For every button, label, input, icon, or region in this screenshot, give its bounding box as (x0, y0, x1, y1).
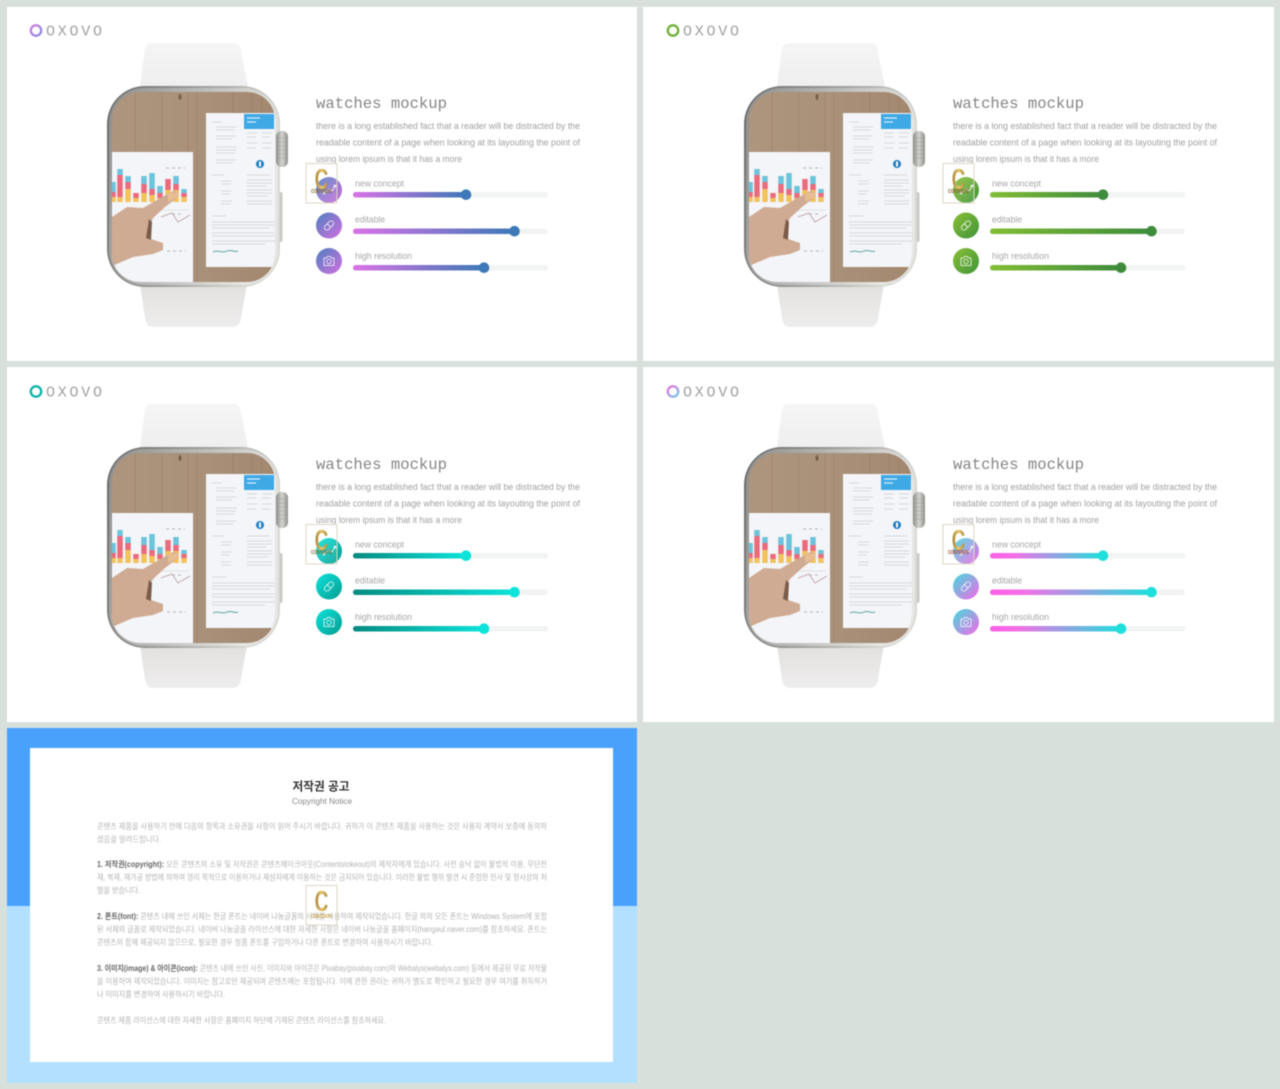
copyright section 3 (97, 963, 547, 999)
watermark: C (952, 525, 965, 557)
body text (953, 121, 1217, 164)
body text: readable content of a page when looking at its layouting the point of (953, 138, 1217, 148)
logo: OXOVO (46, 24, 102, 40)
progress: editable (953, 574, 1185, 600)
copyright section 1: 1. 저작권(copyright): 모든 콘텐츠의 소유 및 저작권은 콘텐츠메이크아웃(Contentstokeout)의 제작자에게 있습니다. 사전 승낙 없이 불법적 이용, 무단전 (97, 859, 547, 869)
copyright section 2 (97, 911, 548, 947)
progress: editable: editable (355, 576, 385, 586)
progress: editable (316, 212, 548, 238)
progress: high resolution: high resolution (992, 251, 1049, 261)
progress: high resolution: high resolution (355, 612, 412, 622)
watch mockup (107, 43, 288, 327)
copyright section 2: 2. 폰트(font): 콘텐츠 내에 쓰인 서체는 한글 폰트는 네이버 나눔글꼴의 서체를 사용하여 제작되었습니다. 한글 외의 모든 폰트는 Windows System에 포함 (97, 911, 548, 921)
watermark: CONTENTS (948, 550, 970, 556)
body text: there is a long established fact that a reader will be distracted by the (953, 482, 1217, 492)
heading: watches mockup (953, 456, 1084, 474)
watermark (306, 164, 337, 203)
progress: new concept: new concept (355, 540, 404, 550)
copyright intro: 셨음을 알려드립니다. (97, 834, 161, 844)
panel: purple watch slide (7, 7, 637, 361)
body text: using lorem ipsum is that it has a more (953, 154, 1099, 164)
heading: watches mockup (953, 95, 1084, 113)
copyright footer note: 콘텐츠 제품 라이선스에 대한 자세한 사항은 홈페이지 하단에 기재된 콘텐츠 라이선스를 참조하세요. (97, 1015, 386, 1025)
watermark: C (315, 525, 328, 557)
watermark: C (315, 164, 328, 196)
body text (316, 482, 580, 525)
copyright section 1: 벌을 받습니다. (97, 885, 140, 895)
copyright intro: 콘텐츠 제품을 사용하기 전에 다음의 항목과 소유권을 사항이 읽어 주시기 바랍니다. 귀하가 이 콘텐츠 제품을 사용하는 것은 사용자 계약서 보증에 동의하 (97, 821, 548, 831)
progress: high resolution (953, 609, 1185, 635)
body text: there is a long established fact that a reader will be distracted by the (953, 121, 1217, 131)
progress: editable (316, 574, 548, 600)
watermark: C (315, 886, 328, 918)
progress: high resolution: high resolution (355, 251, 412, 261)
copyright section 3: 나 이미지를 변경하여 사용하시기 바랍니다. (97, 989, 225, 999)
progress: high resolution: high resolution (992, 612, 1049, 622)
logo: OXOVO (46, 384, 102, 402)
watermark (306, 886, 337, 925)
body text: using lorem ipsum is that it has a more (316, 515, 462, 525)
progress: high resolution (316, 609, 548, 635)
progress: new concept: new concept (992, 540, 1041, 550)
logo: OXOVO (683, 24, 739, 40)
copyright title: 저작권 공고 (292, 778, 350, 794)
watermark: C (952, 164, 965, 196)
progress: new concept (953, 177, 1185, 203)
watch mockup (744, 404, 925, 688)
copyright title: Copyright Notice (292, 796, 352, 806)
watermark (943, 524, 974, 564)
body text (316, 121, 580, 164)
body text (953, 482, 1217, 525)
panel: teal watch slide (7, 367, 637, 722)
panel: green watch slide (643, 7, 1274, 361)
body text: there is a long established fact that a reader will be distracted by the (316, 121, 580, 131)
watermark: CONTENTS (311, 189, 333, 195)
body text: readable content of a page when looking at its layouting the point of (953, 498, 1217, 508)
watermark: CONTENTS (311, 550, 333, 556)
heading: watches mockup (316, 95, 447, 113)
body text: there is a long established fact that a reader will be distracted by the (316, 482, 580, 492)
progress: editable: editable (355, 214, 385, 224)
watermark: CONTENTS (948, 189, 970, 195)
panel: pink watch slide (643, 367, 1274, 722)
progress: new concept: new concept (355, 178, 404, 188)
watermark (306, 524, 337, 564)
body text: readable content of a page when looking at its layouting the point of (316, 138, 580, 148)
copyright section 1 (97, 859, 547, 895)
progress: editable: editable (992, 576, 1022, 586)
progress: new concept (316, 538, 548, 564)
progress: new concept (316, 177, 548, 203)
body text: using lorem ipsum is that it has a more (953, 515, 1099, 525)
copyright section 3: 3. 이미지(image) & 아이콘(icon): 콘텐츠 내에 쓰인 사진, 이미지와 아이콘은 Pixabay(pixabay.com)와 Webalys(webalys.com) 등에서 제공된 무료 저작물 (97, 963, 547, 973)
copyright title (292, 778, 352, 806)
watermark: CONTENTS (311, 914, 333, 920)
logo: OXOVO (683, 384, 739, 402)
progress: new concept (953, 538, 1185, 564)
heading: watches mockup (316, 456, 447, 474)
progress: high resolution (953, 248, 1185, 274)
body text: readable content of a page when looking at its layouting the point of (316, 498, 580, 508)
progress: new concept: new concept (992, 178, 1041, 188)
watermark (943, 164, 974, 203)
progress: editable (953, 212, 1185, 238)
panel: copyright notice (7, 728, 637, 1083)
copyright intro (97, 821, 548, 844)
progress: high resolution (316, 248, 548, 274)
progress: editable: editable (992, 214, 1022, 224)
watch mockup (107, 404, 288, 688)
body text: using lorem ipsum is that it has a more (316, 154, 462, 164)
copyright section 1: 재, 복제, 재가공 방법에 의하여 영리 목적으로 이용하거나 제삼자에게 이용하는 것은 금지되어 있습니다. 이러한 불법 행위 발견 시 준엄한 민사 및 형사상의 처 (97, 872, 547, 882)
copyright section 3: 을 이용하여 제작되었습니다. 이미지는 참고로만 제공되며 콘텐츠에는 포함됩니다. 이에 관한 권리는 귀하가 별도로 확인하고 필요한 경우 여기를 취득하거 (97, 976, 547, 986)
copyright section 2: 된 서체의 글꼴로 제작되었습니다. 네이버 나눔글꼴 라이선스에 대한 자세한 사항은 네이버 나눔글꼴 홈페이지(hangeul.naver.com)를 참조하세요. 폰트는 (97, 924, 547, 934)
watch mockup (744, 43, 925, 327)
copyright section 2: 콘텐츠의 함께 제공되지 않으므로, 필요한 경우 정품 폰트를 구입하거나 다른 폰트로 변경하여 사용하시기 바랍니다. (97, 937, 433, 947)
